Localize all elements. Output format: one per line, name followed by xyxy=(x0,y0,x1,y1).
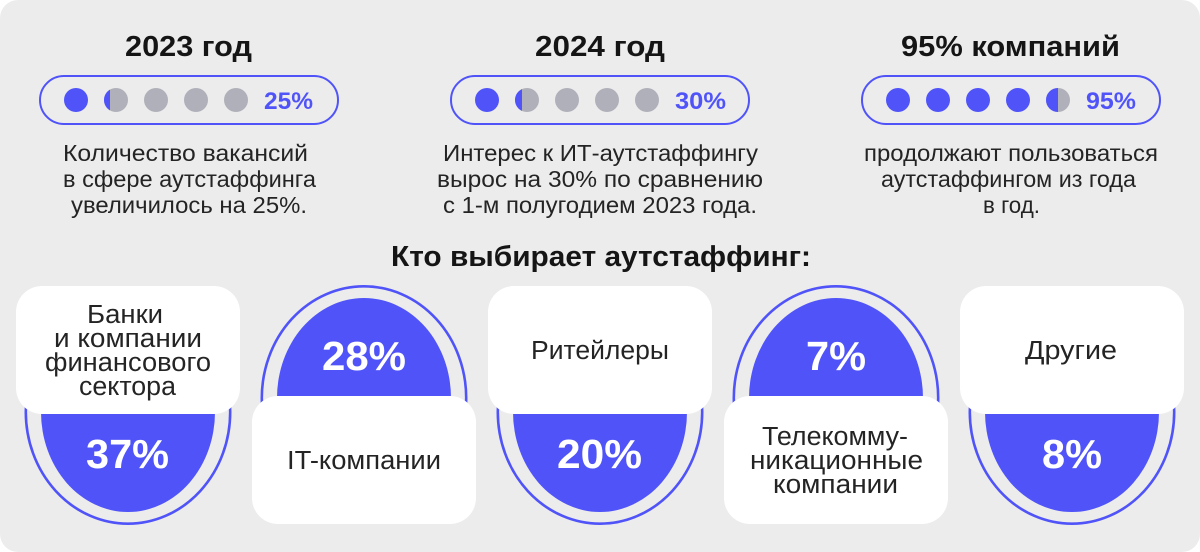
badge: 8% xyxy=(970,300,1174,524)
card: other xyxy=(960,286,1184,414)
badge: 7% xyxy=(734,286,938,510)
card: telecom: никационные xyxy=(750,447,923,475)
card: other: Другие xyxy=(1025,337,1117,365)
progress pill: 95% xyxy=(862,76,1160,124)
panel: 2023 xyxy=(40,31,338,218)
segment: IT 28% xyxy=(252,286,476,524)
segment: telecom 7% xyxy=(724,286,948,524)
badge: 28%: 28% xyxy=(322,333,406,379)
card: retail xyxy=(488,286,712,414)
progress pill: 25%: 25% xyxy=(264,88,313,115)
description: 95% xyxy=(864,140,1158,218)
description: 95%: продолжают пользоваться xyxy=(864,140,1158,166)
card: telecom: компании xyxy=(773,471,898,499)
section title: Кто выбирает аутстаффинг: xyxy=(391,241,811,273)
heading: 2023: 2023 год xyxy=(125,31,252,63)
badge: 20%: 20% xyxy=(557,431,642,477)
description: 2024: Интерес к ИТ-аутстаффингу xyxy=(443,140,759,166)
card: banks: Банки xyxy=(87,301,163,329)
card: banks xyxy=(16,286,240,414)
progress pill: 25% xyxy=(40,76,338,124)
badge: 37% xyxy=(26,300,230,524)
card: IT: IT-компании xyxy=(287,447,441,475)
description: 95%: в год. xyxy=(983,192,1040,218)
badge: 28% xyxy=(262,286,466,510)
badge: 8%: 8% xyxy=(1042,431,1102,477)
description: 2023: увеличилось на 25%. xyxy=(71,192,307,218)
segment: other 8% xyxy=(960,286,1184,524)
progress pill: 30%: 30% xyxy=(675,88,726,115)
badge: 7%: 7% xyxy=(806,333,866,379)
description: 2024: вырос на 30% по сравнению xyxy=(437,166,763,192)
card: telecom: Телекомму- xyxy=(762,423,908,451)
panel: 95% xyxy=(862,31,1160,218)
heading: 95%: 95% компаний xyxy=(901,31,1120,63)
description: 2023 xyxy=(63,140,316,218)
description: 2023: Количество вакансий xyxy=(63,140,308,166)
card: banks: сектора xyxy=(79,373,177,401)
segment: banks 37% xyxy=(16,286,240,524)
card: banks: и компании xyxy=(54,325,202,353)
description: 2023: в сфере аутстаффинга xyxy=(63,166,316,192)
panel: 2024 xyxy=(437,31,763,218)
card: banks: финансового xyxy=(45,349,211,377)
progress pill: 30% xyxy=(451,76,749,124)
description: 2024: с 1-м полугодием 2023 года. xyxy=(443,192,757,218)
card: retail: Ритейлеры xyxy=(531,337,669,365)
description: 95%: аутстаффингом из года xyxy=(881,166,1136,192)
description: 2024 xyxy=(437,140,763,218)
badge: 20% xyxy=(498,300,702,524)
progress pill: 95%: 95% xyxy=(1086,88,1136,115)
badge: 37%: 37% xyxy=(86,431,169,477)
heading: 2024: 2024 год xyxy=(535,31,665,63)
segment: retail 20% xyxy=(488,286,712,524)
card: telecom xyxy=(724,396,948,524)
card: IT xyxy=(252,396,476,524)
